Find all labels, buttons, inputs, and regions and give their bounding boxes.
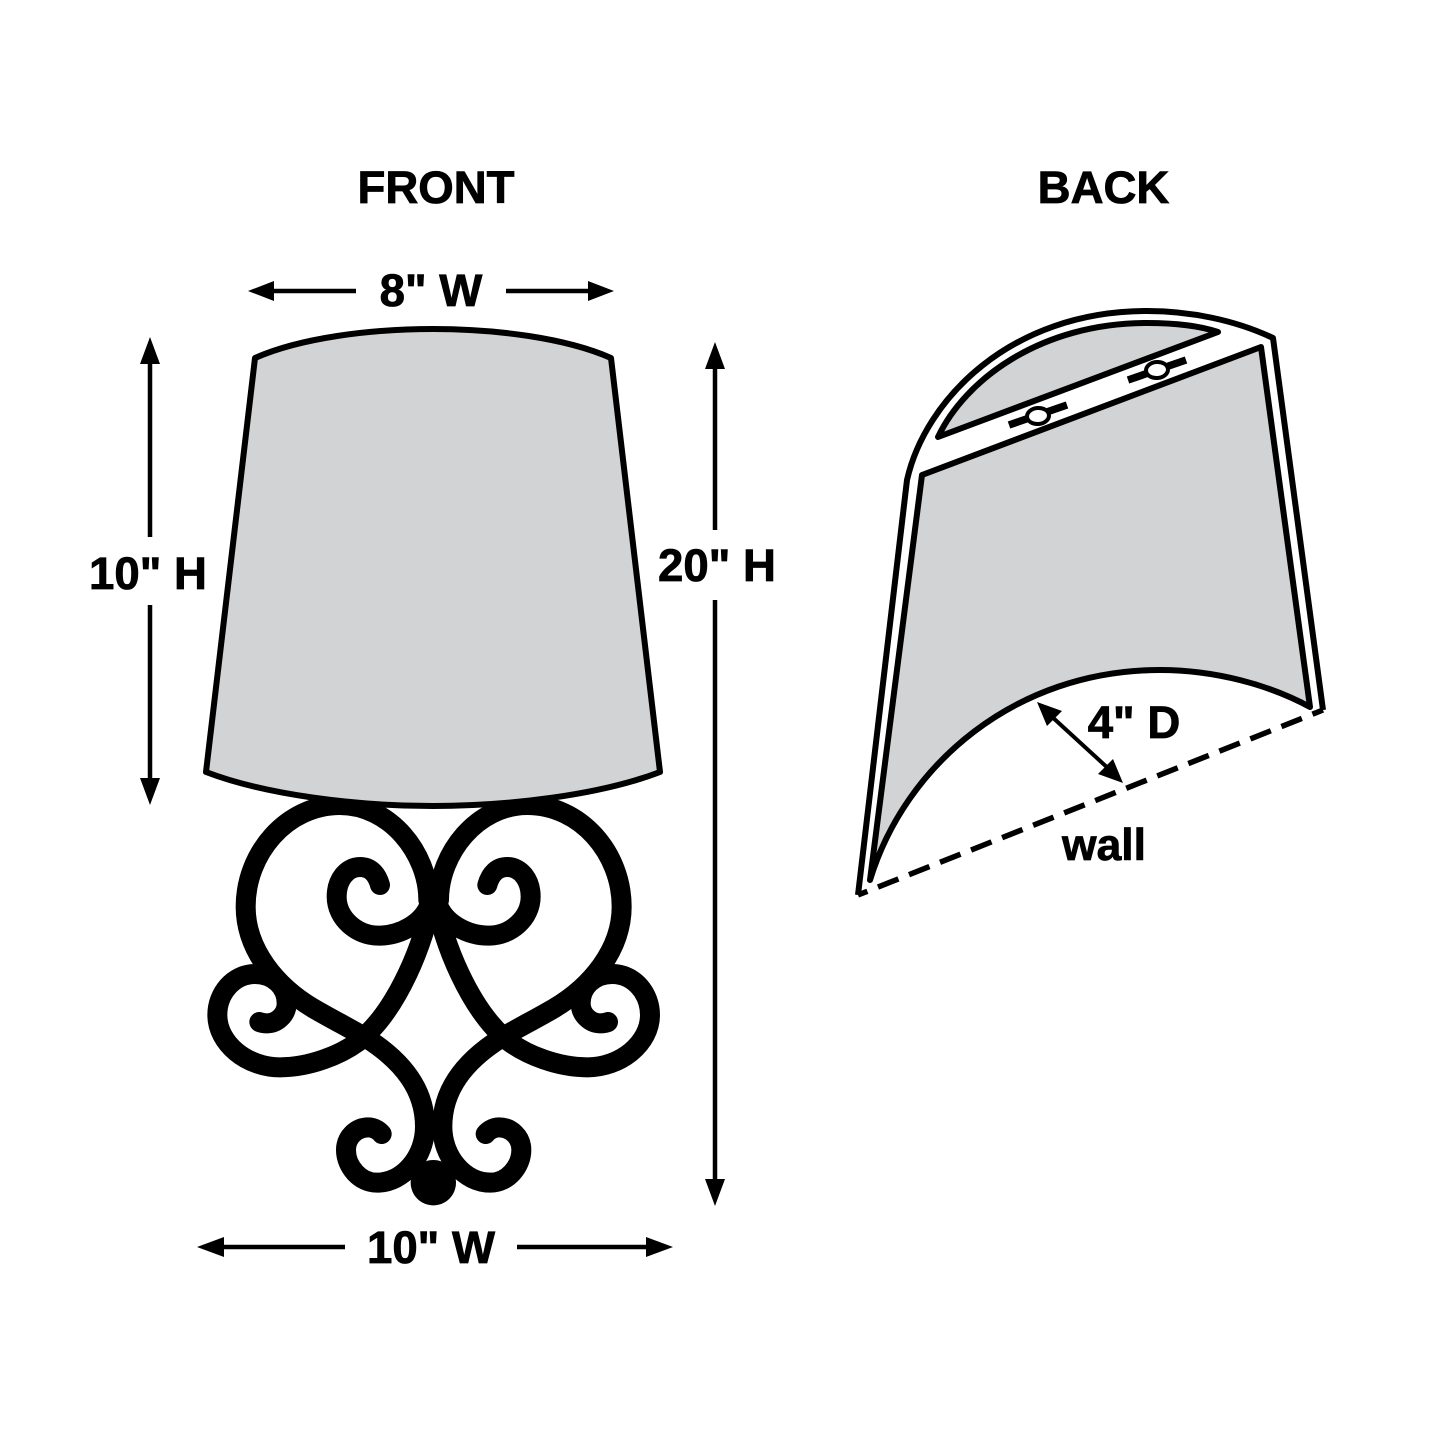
back view: dashed wall line [858, 710, 1323, 895]
label: 10 inch height: 10" H [89, 548, 207, 599]
back view: main shade opening [870, 347, 1310, 880]
label: 8 inch width: 8" W [380, 265, 482, 316]
label: 10 inch width: 10" W [367, 1222, 495, 1273]
dimension arrow: 4 inch depth [1037, 702, 1123, 783]
dimension arrow: 20 inch total height [705, 342, 725, 1206]
back view: mounting bracket right [1128, 360, 1186, 380]
heading: FRONT: FRONT [357, 162, 515, 213]
front view: lamp shade [206, 329, 660, 806]
front view: wrought iron scroll base [217, 805, 650, 1205]
back view: outer shell outline [858, 311, 1323, 895]
back view: mounting bracket left [1009, 405, 1067, 425]
label: wall: wall [1061, 821, 1146, 870]
back view: upper shade opening [938, 323, 1218, 437]
label: 20 inch height: 20" H [658, 540, 776, 591]
heading: BACK: BACK [1038, 162, 1169, 213]
dimension arrow: 8 inch width [248, 281, 614, 301]
label: 4 inch depth: 4" D [1088, 697, 1180, 748]
dimension arrow: 10 inch width [197, 1237, 673, 1257]
dimension arrow: 10 inch shade height [140, 337, 160, 805]
